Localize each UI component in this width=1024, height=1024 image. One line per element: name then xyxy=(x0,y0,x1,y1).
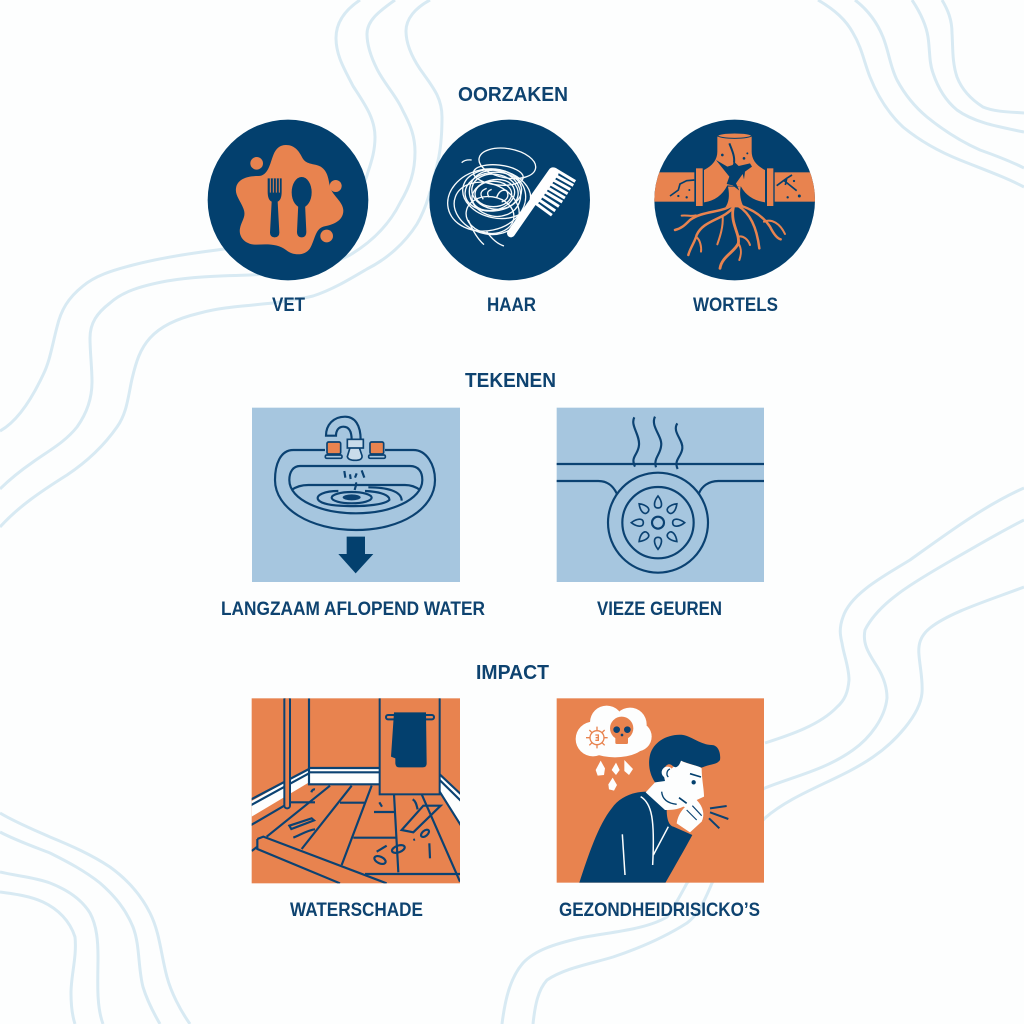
arrow: down xyxy=(338,537,373,573)
icon: grease blob with fork and spoon xyxy=(208,120,368,280)
panel: waterschade xyxy=(250,697,462,921)
heading: impact: IMPACT xyxy=(476,662,549,684)
section: tekenen xyxy=(221,370,764,620)
panel: haar xyxy=(429,120,590,316)
label: haar: HAAR xyxy=(487,295,536,316)
icon: tangled hair and comb xyxy=(429,120,590,280)
cough lines xyxy=(709,806,728,828)
panel: vet xyxy=(208,120,368,316)
icon: coughing man with hazard cloud xyxy=(557,698,764,884)
panel: wortels xyxy=(650,120,818,316)
label: waterschade: WATERSCHADE xyxy=(290,900,423,921)
label: gezondheidsrisico's: GEZONDHEIDRISICKO’S xyxy=(559,900,760,921)
thought cloud with germ and skull xyxy=(576,706,652,791)
icon: cracked pipe with roots xyxy=(650,120,818,280)
section: impact xyxy=(250,662,764,921)
label: vet: VET xyxy=(272,295,305,316)
man xyxy=(579,735,720,884)
label: wortels: WORTELS xyxy=(693,295,778,316)
icon: drain with odour waves xyxy=(557,408,764,582)
icon: sink with slow drain xyxy=(252,408,460,582)
panel: langzaam aflopend water xyxy=(221,408,485,620)
panel: gezondheidsrisico's xyxy=(557,698,764,921)
icon: water damaged floor xyxy=(250,697,462,883)
panel: vieze geuren xyxy=(557,408,764,620)
heading: oorzaken: OORZAKEN xyxy=(458,84,568,106)
label: langzaam aflopend water: LANGZAAM AFLOPEND WATER xyxy=(221,599,485,620)
heading: tekenen: TEKENEN xyxy=(465,370,556,392)
label: vieze geuren: VIEZE GEUREN xyxy=(597,599,722,620)
section: oorzaken xyxy=(208,84,818,316)
